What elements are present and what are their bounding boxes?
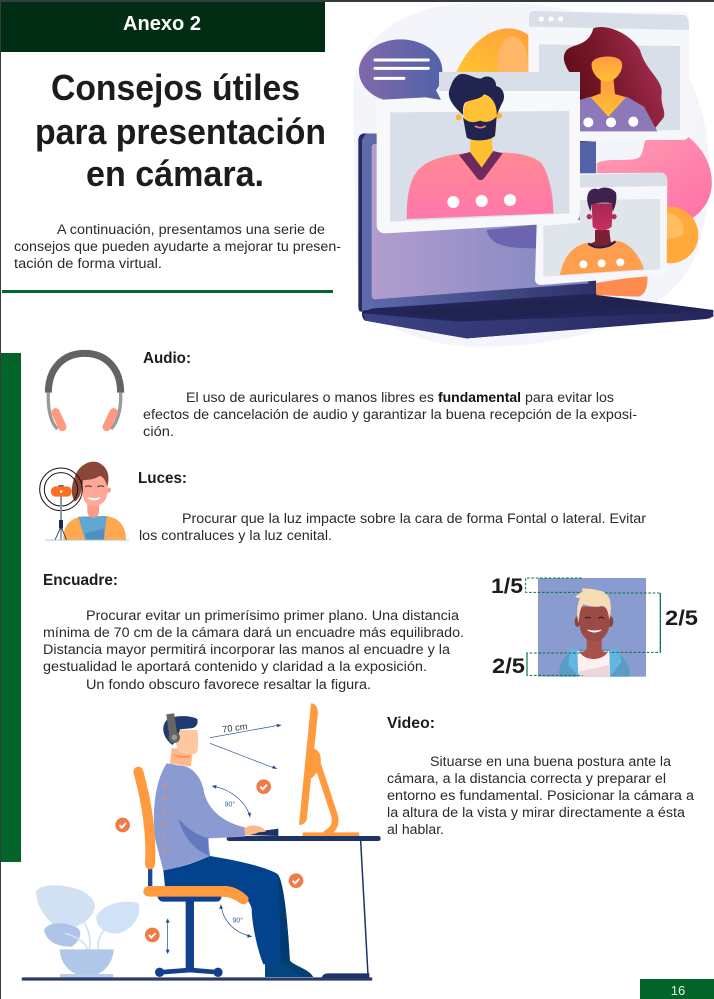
laptop bbox=[358, 133, 713, 338]
header label: Anexo 2 bbox=[123, 13, 201, 35]
label 1/5: 1/5 bbox=[491, 575, 523, 598]
section: audio bbox=[48, 350, 637, 439]
intro text: consejos que pueden ayudarte a mejorar tu presen- bbox=[14, 239, 341, 254]
plant bbox=[36, 885, 139, 978]
lights text: los contraluces y la luz cenital. bbox=[139, 528, 332, 543]
framing diagram bbox=[526, 578, 660, 677]
lights text bbox=[139, 511, 647, 543]
audio text: ción. bbox=[143, 424, 174, 439]
window: main man bbox=[377, 72, 580, 233]
monitor bbox=[299, 703, 359, 836]
illustration: ergonomic posture at desk bbox=[22, 703, 381, 981]
label 2/5 right: 2/5 bbox=[665, 607, 698, 630]
lights text: Procurar que la luz impacte sobre la cara de forma Fontal o lateral. Evitar bbox=[182, 511, 647, 526]
side green bar bbox=[1, 353, 21, 862]
floor bbox=[22, 977, 372, 981]
video text: entorno es fundamental. Posicionar la cámara a bbox=[387, 788, 695, 803]
check badges bbox=[115, 779, 303, 942]
header band bbox=[1, 2, 325, 52]
video text: al hablar. bbox=[387, 822, 444, 837]
audio text: efectos de cancelación de audio y garantizar la buena recepción de la exposi- bbox=[143, 407, 637, 422]
video text bbox=[387, 754, 695, 837]
arrow heads bbox=[166, 724, 282, 954]
intro text: tación de forma virtual. bbox=[14, 256, 162, 271]
icon: headphones bbox=[48, 353, 121, 429]
lights heading: Luces: bbox=[138, 470, 187, 487]
arrows and angle marks bbox=[168, 725, 278, 952]
video text: cámara, a la distancia correcta y preparar el bbox=[387, 771, 666, 786]
framing text: mínima de 70 cm de la cámara dará un encuadre más equilibrado. bbox=[43, 625, 464, 640]
video text: Situarse en una buena postura ante la bbox=[430, 754, 672, 769]
section: framing bbox=[43, 572, 698, 692]
intro divider bbox=[2, 290, 333, 293]
video heading: Video: bbox=[387, 715, 435, 732]
framing text: Distancia mayor permitirá incorporar las manos al encuadre y la bbox=[43, 642, 451, 657]
angle label upper: 90° bbox=[225, 801, 235, 809]
framing text: Procurar evitar un primerísimo primer plano. Una distancia bbox=[86, 608, 460, 623]
framing text bbox=[43, 608, 464, 692]
title bbox=[35, 67, 326, 194]
illustration: video call on laptop bbox=[353, 3, 713, 347]
title: Consejos útiles bbox=[51, 67, 300, 108]
top page edge bbox=[0, 0, 714, 2]
title: en cámara. bbox=[86, 153, 264, 194]
title: para presentación bbox=[35, 111, 326, 152]
distance label: 70 cm bbox=[222, 721, 248, 735]
framing heading: Encuadre: bbox=[43, 572, 118, 589]
page number: 16 bbox=[671, 983, 685, 998]
framing text: gestualidad le aportará contenido y claridad a la exposición. bbox=[43, 659, 427, 674]
desk bbox=[227, 829, 381, 978]
intro text bbox=[14, 222, 341, 271]
chair bbox=[138, 772, 223, 977]
page number bbox=[640, 979, 714, 999]
framing text: Un fondo obscuro favorece resaltar la figura. bbox=[86, 677, 371, 692]
intro text: A continuación, presentamos una serie de bbox=[57, 222, 325, 237]
section: video bbox=[22, 703, 695, 981]
window: woman bbox=[528, 11, 689, 140]
window: young man bbox=[535, 173, 667, 285]
angle label lower: 90° bbox=[232, 917, 243, 925]
video text: la altura de la vista y mirar directamente a ésta bbox=[387, 805, 686, 820]
person bbox=[143, 713, 313, 977]
audio text: para evitar los bbox=[525, 390, 614, 405]
audio text bbox=[143, 390, 637, 439]
left page edge bbox=[0, 0, 1, 999]
label 2/5 bottom: 2/5 bbox=[492, 655, 525, 678]
section: lights bbox=[40, 462, 647, 543]
icon: ring light with person bbox=[40, 462, 129, 541]
audio text: El uso de auriculares o manos libres es bbox=[186, 390, 434, 405]
speech bubble bbox=[359, 39, 442, 102]
audio heading: Audio: bbox=[143, 350, 191, 367]
audio text: fundamental bbox=[438, 390, 521, 405]
